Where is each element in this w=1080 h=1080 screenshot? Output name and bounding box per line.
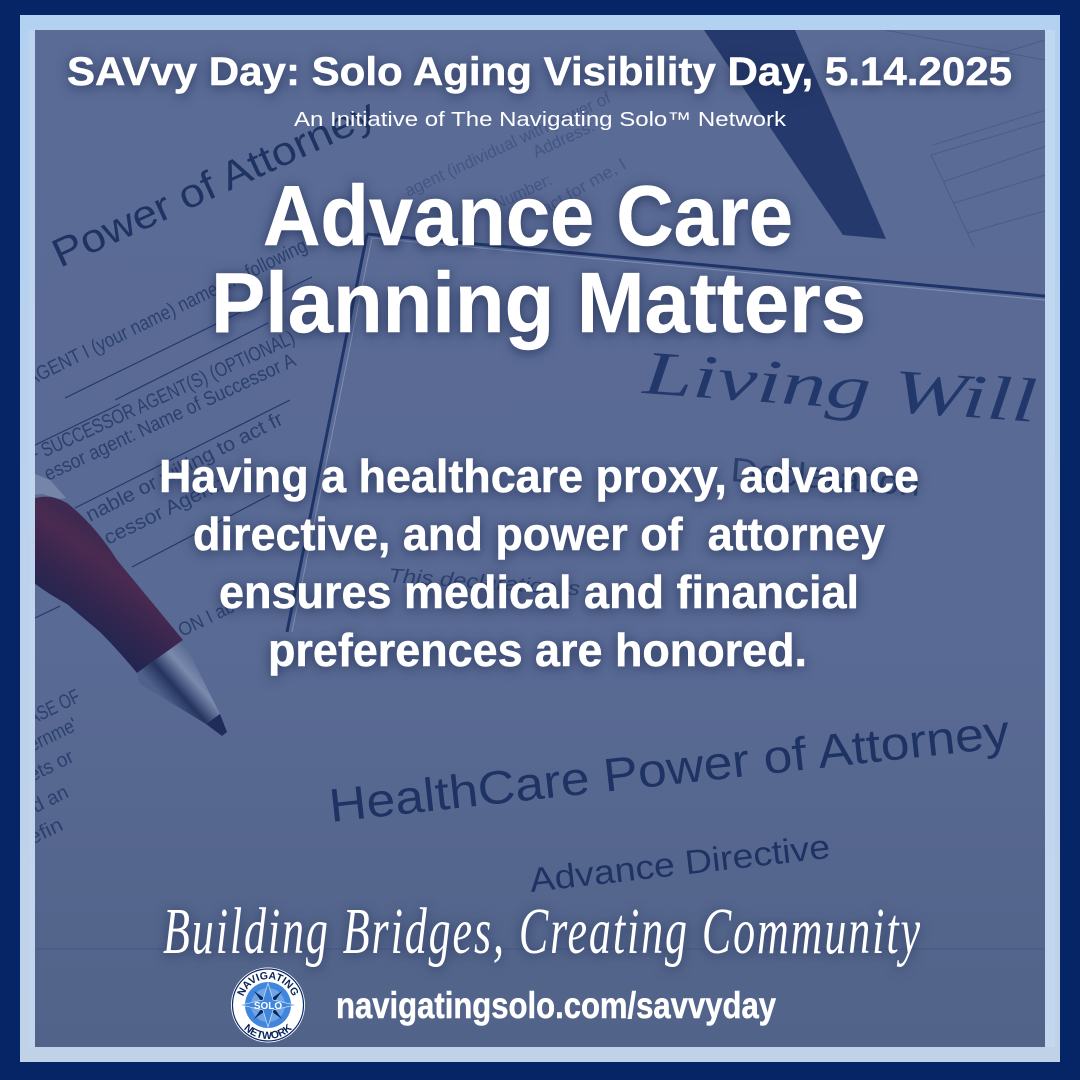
logo: Navigating Solo Network compass: SOLO	[254, 1001, 282, 1012]
claim form faint table	[885, 30, 1055, 247]
body statement: preferences are honored.	[268, 624, 807, 676]
main title: Planning Matters	[211, 256, 866, 351]
website url: navigatingsolo.com/savvyday	[336, 985, 776, 1026]
agent form text: ets or	[25, 746, 78, 786]
body statement: ensures medical and financial	[219, 566, 859, 618]
agent form text: IF SUCCESSOR AGENT(S) (OPTIONAL)	[21, 327, 298, 470]
header line: SAVvy Day: Solo Aging Visibility Day, 5.14.2025	[67, 50, 1012, 94]
agent form text: ON I ab	[175, 596, 238, 641]
Power of Attorney document text: Power of Attorney	[45, 91, 382, 276]
agent form text: id an	[25, 781, 72, 819]
main title: Advance Care	[263, 169, 793, 264]
body statement: Having a healthcare proxy, advance	[159, 450, 919, 502]
subheader: An Initiative of The Navigating Solo™ Network	[294, 109, 787, 131]
logo: Navigating Solo Network compass: NAVIGATING	[237, 972, 298, 996]
HealthCare Power of Attorney text: HealthCare Power of Attorney	[326, 704, 1013, 832]
folded document edges	[287, 234, 1055, 632]
faint horizontal fold	[35, 948, 1045, 950]
logo: Navigating Solo Network compass	[231, 968, 305, 1042]
faint agent form text upper center: Address:	[530, 117, 598, 162]
agent form text: efin	[25, 814, 67, 849]
script tagline: Building Bridges, Creating Community	[163, 895, 920, 968]
faint agent form text upper center: Number:	[491, 170, 555, 214]
body statement: directive, and power of attorney	[193, 508, 885, 560]
form rule lines	[35, 277, 312, 618]
pen	[30, 474, 227, 736]
logo: Navigating Solo Network compass: NETWORK	[244, 1024, 292, 1039]
dark wedge	[704, 30, 886, 239]
frame ghost strips	[29, 30, 35, 1047]
main title	[211, 169, 866, 351]
agent form text: essor agent: Name of Successor A	[41, 349, 300, 486]
declaration fragments: Declaration	[729, 451, 922, 504]
agent form text: ASE OF	[25, 686, 84, 729]
faint agent form text upper center: act for me, I	[538, 155, 629, 218]
Advance Directive text: Advance Directive	[528, 828, 832, 900]
declaration fragments	[388, 451, 922, 600]
agent form text: nable or willing to act fr	[82, 408, 287, 526]
body statement	[159, 450, 919, 676]
declaration fragments: This declaration is	[388, 565, 581, 600]
agent form text: AGENT I (your name) name the following	[23, 235, 311, 390]
Living Will script: Living Will	[640, 339, 1039, 436]
agent form text: ernme'	[25, 714, 81, 756]
agent form text	[21, 235, 311, 849]
faint agent form text upper center: agent (individual with power of	[402, 88, 614, 201]
agent form text: cessor Agent:	[101, 473, 227, 549]
